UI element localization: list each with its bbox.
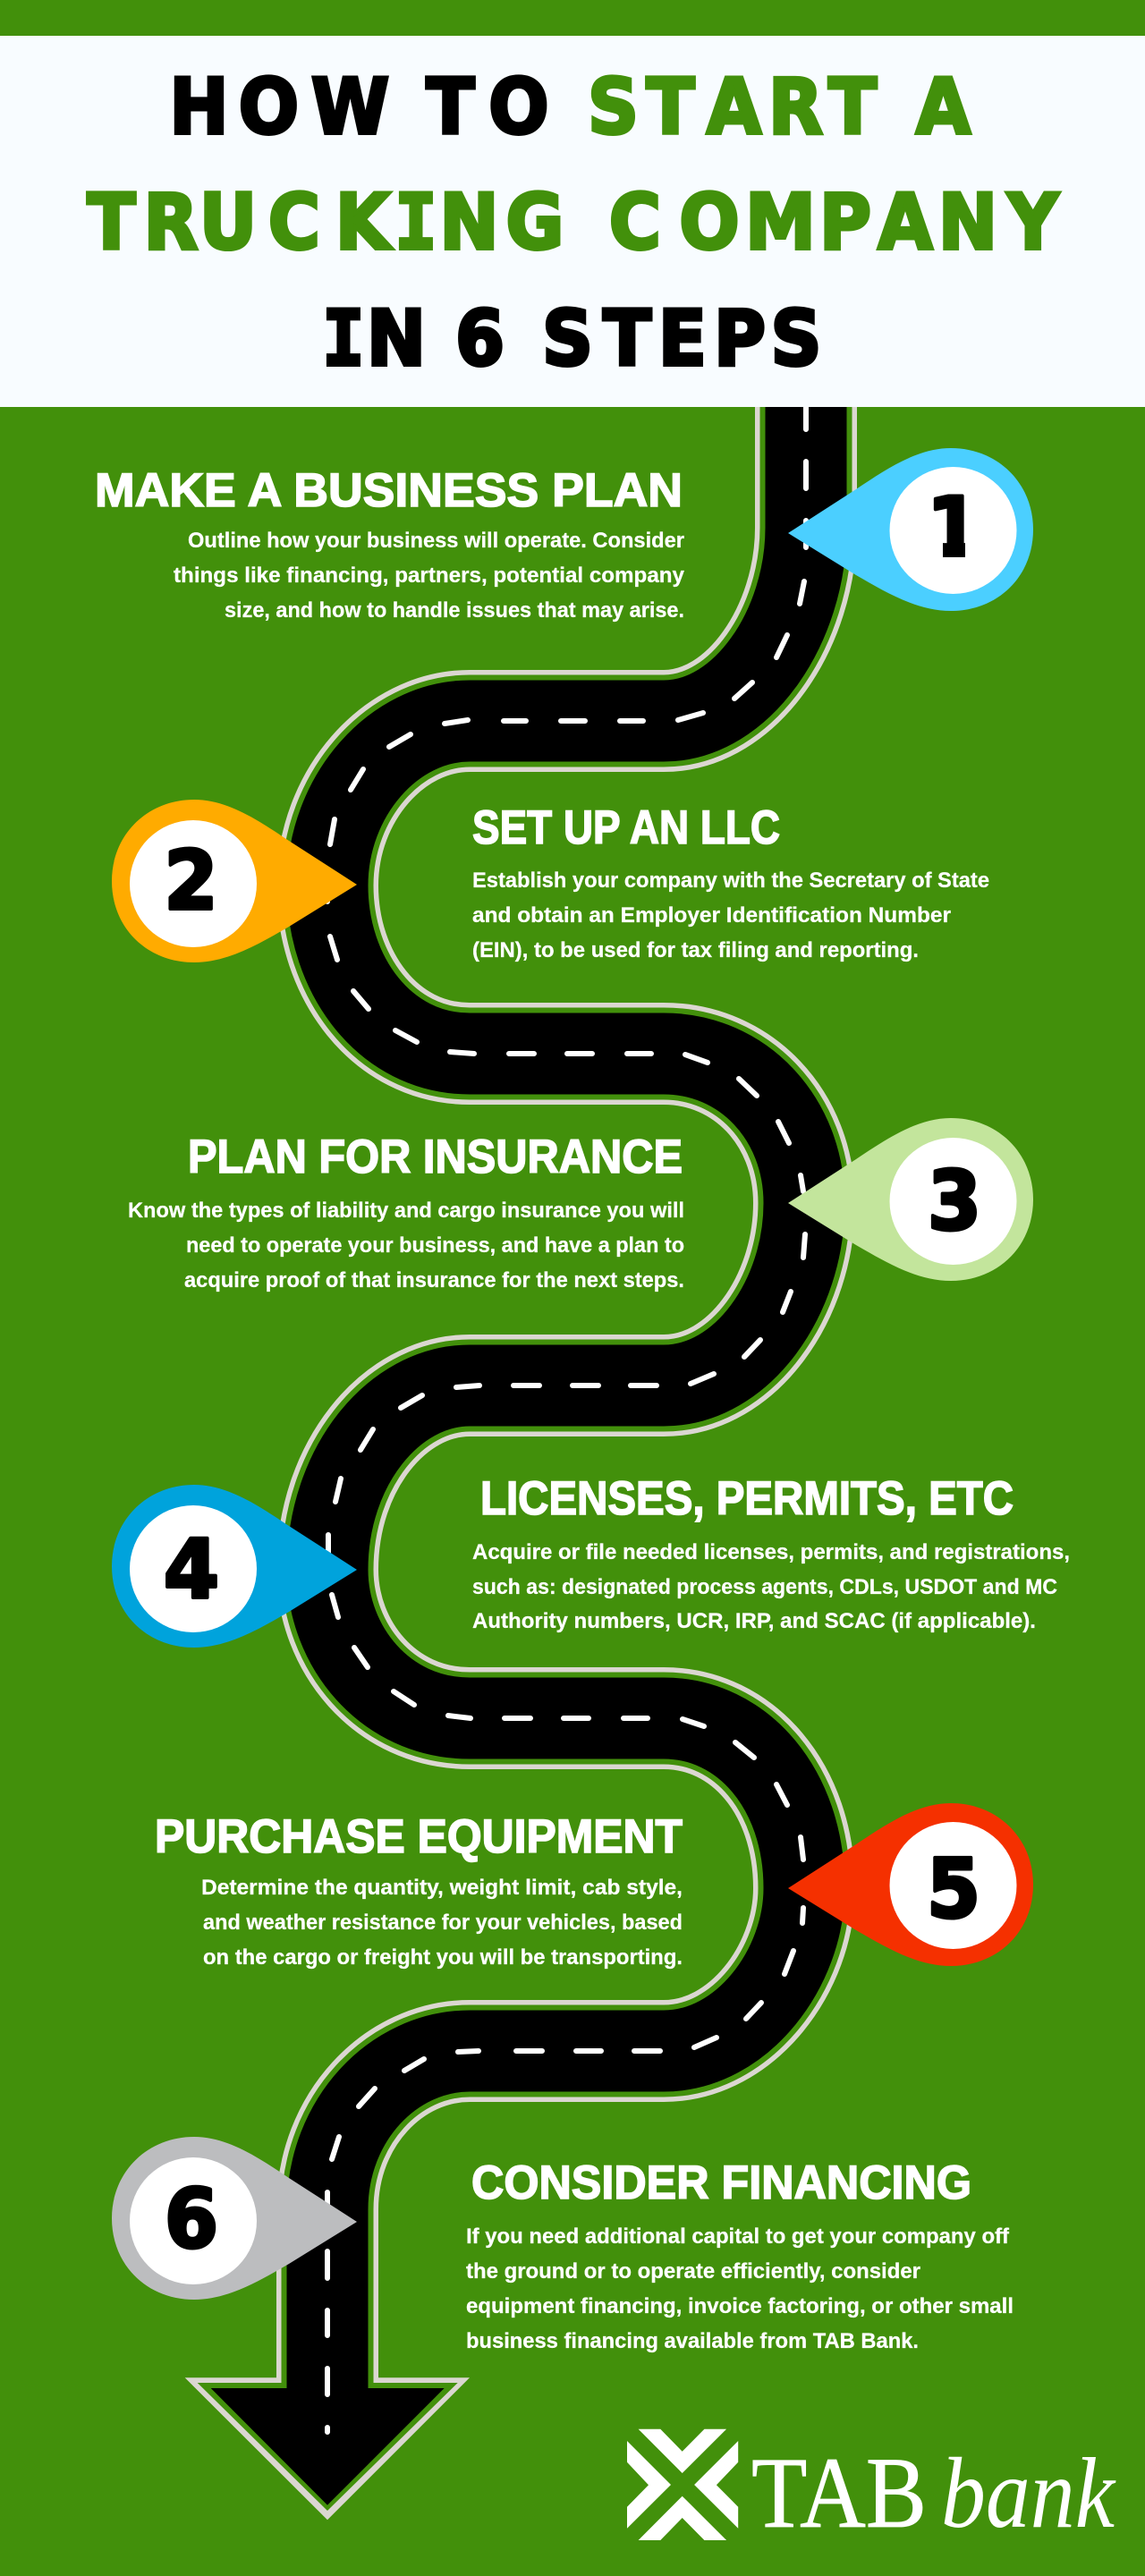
step 1 text: Outline how your business will operate. Consider [188,529,684,553]
pin 3 [788,1118,1033,1281]
step 6 text: business financing available from TAB Bank. [466,2329,919,2353]
pin 5: 5 [927,1843,980,1936]
title line 3: IN [322,294,426,384]
title line 3: 6 [455,294,505,384]
title line 1: START [588,63,877,152]
step 4 text: LICENSES, PERMITS, ETC [480,1472,1014,1525]
step 6 text: If you need additional capital to get your company off [466,2224,1010,2249]
header band [0,36,1145,407]
step 2 text: and obtain an Employer Identification Number [472,903,951,928]
step 4 text: such as: designated process agents, CDLs, USDOT and MC [472,1575,1057,1599]
step 5 text: Determine the quantity, weight limit, cab style, [201,1876,683,1900]
title line 1 [169,63,971,152]
pin 1: 1 [927,481,980,575]
step 5 text: and weather resistance for your vehicles, based [203,1911,683,1935]
step 4 text: Acquire or file needed licenses, permits, and registrations, [472,1540,1070,1564]
logo: TAB bank [627,2429,1116,2549]
title line 2: COMPANY [609,178,1060,267]
step 2 text: SET UP AN LLC [472,801,780,854]
title line 1: HOW [169,63,389,152]
step 6 text: equipment financing, invoice factoring, or other small [466,2294,1014,2318]
pin 2 [112,800,357,962]
step 4 text [472,1472,1070,1633]
step 1 text: MAKE A BUSINESS PLAN [95,464,683,517]
pin 4 [112,1485,357,1648]
title line 3: STEPS [542,294,821,384]
logo: TAB bank: TAB [751,2437,927,2549]
title line 1: A [916,63,971,152]
pin 6 [112,2137,357,2300]
pin 1 [788,448,1033,611]
logo: TAB bank: bank [941,2438,1116,2549]
step 5 text [155,1810,683,1970]
step 6 text [466,2157,1014,2353]
step 1 text: size, and how to handle issues that may arise. [225,598,684,623]
title line 2 [88,178,1060,267]
title line 2: TRUCKING [88,178,564,267]
title line 3 [322,294,821,384]
title line 1: TO [427,63,549,152]
step 3 text: need to operate your business, and have a plan to [186,1233,684,1258]
step 5 text: PURCHASE EQUIPMENT [155,1810,683,1863]
step 3 text [128,1131,684,1292]
pin 3: 3 [928,1155,981,1249]
pin 4: 4 [164,1523,219,1617]
pin 2: 2 [165,835,218,928]
step 3 text: acquire proof of that insurance for the next steps. [184,1268,684,1292]
step 3 text: PLAN FOR INSURANCE [188,1131,683,1183]
step 2 text: Establish your company with the Secretary of State [472,869,989,893]
step 6 text: the ground or to operate efficiently, consider [466,2259,920,2284]
step 6 text: CONSIDER FINANCING [471,2157,971,2209]
pin 6: 6 [165,2173,218,2267]
step 5 text: on the cargo or freight you will be transporting. [203,1945,683,1970]
pin 5 [788,1803,1033,1966]
step 4 text: Authority numbers, UCR, IRP, and SCAC (if applicable). [472,1609,1036,1633]
step 2 text [472,801,989,962]
step 1 text: things like financing, partners, potential company [174,564,685,588]
step 1 text [95,464,685,623]
step 2 text: (EIN), to be used for tax filing and reporting. [472,938,919,962]
step 3 text: Know the types of liability and cargo insurance you will [128,1199,684,1223]
icon: X mark [627,2429,738,2540]
road with arrowhead [185,407,806,2520]
